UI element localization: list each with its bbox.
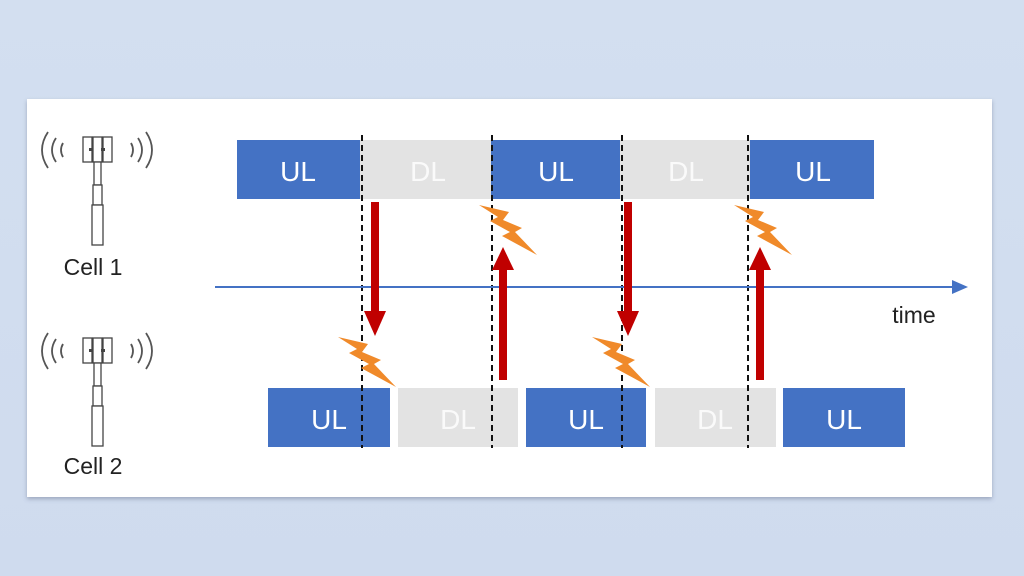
cell 1 frame row: UL: [538, 156, 574, 187]
arrow: interference up 1: [492, 247, 514, 380]
cell 1 frame row: DL: [668, 156, 704, 187]
arrow: interference down 1: [364, 202, 386, 336]
label: Cell 2: Cell 2: [64, 453, 122, 479]
time axis arrow: [215, 280, 968, 294]
label: Cell 1: Cell 1: [64, 254, 122, 280]
arrow: interference down 2: [617, 202, 639, 336]
cell 2 frame row: UL: [568, 404, 604, 435]
icon: lightning 1: [479, 205, 537, 255]
icon: lightning 3: [338, 337, 396, 387]
cell 2 frame row: DL: [440, 404, 476, 435]
icon: lightning 4: [592, 337, 650, 387]
arrow: interference up 2: [749, 247, 771, 380]
cell 1 frame row: UL: [795, 156, 831, 187]
label: time: time: [892, 302, 936, 328]
icon: lightning 2: [734, 205, 792, 255]
cell 2 frame row: UL: [311, 404, 347, 435]
panel: diagram: [27, 99, 992, 497]
cell 2 frame row: UL: [826, 404, 862, 435]
icon: cell 2 tower: [42, 333, 152, 446]
cell 1 frame row: [237, 140, 874, 199]
cell 1 frame row: DL: [410, 156, 446, 187]
cell 2 frame row: DL: [697, 404, 733, 435]
cell 2 frame row: [268, 388, 905, 447]
icon: cell 1 tower: [42, 132, 152, 245]
cell 1 frame row: UL: [280, 156, 316, 187]
